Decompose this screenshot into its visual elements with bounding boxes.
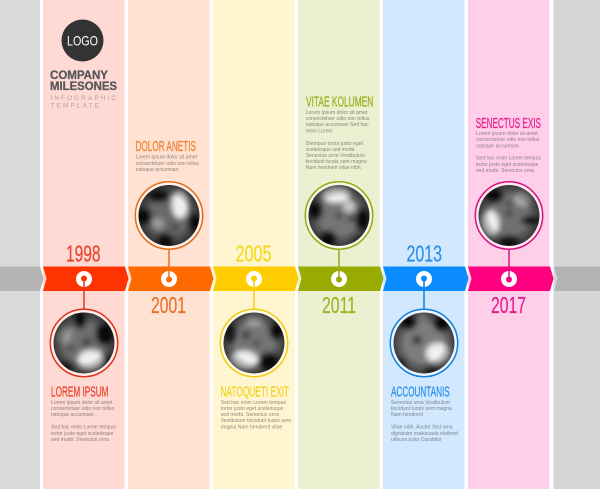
body text: consectetuer odio non tellus (51, 406, 115, 412)
body text: Nam hendrerit vitae nibh. (306, 165, 362, 171)
body text: Senectus urna Vestibulum (391, 400, 450, 406)
body text: Lorem ipsum dolor sit amet (306, 110, 368, 116)
body text: tincidunt turpis sem magna (391, 406, 452, 412)
body text: Sed hac enim Lorem tempus (221, 400, 286, 406)
body text: tortor justo eget scelerisque (51, 431, 113, 437)
body text: sed morbi. Senectus urna (51, 437, 109, 443)
panel: left gray column (0, 0, 40, 489)
panel: column 2005 (213, 0, 295, 489)
body text: Vestibulum tincidunt turpis sem (221, 418, 291, 424)
body text: consectetuer odio non tellus (306, 116, 370, 122)
year: 2001 (151, 292, 186, 318)
connector and node (501, 249, 517, 287)
panel: column 1998 (43, 0, 124, 489)
body text: Lorem ipsum dolor sit amet (51, 400, 113, 406)
title: MILESONES (50, 79, 117, 93)
body text (221, 400, 291, 431)
heading: SENECTUS EXIS (476, 116, 541, 132)
body text: sed morbi. Senectus urna (221, 412, 279, 418)
body text: scelerisque sed morbi. (306, 147, 356, 153)
year: 2013 (406, 240, 442, 266)
year: 2017 (491, 292, 526, 318)
body text (306, 110, 370, 171)
milestone 1998 (43, 240, 128, 443)
connector and node (246, 271, 262, 310)
body text: sed morbi. Senectus urna (476, 168, 534, 174)
panel: column 2013 (383, 0, 464, 489)
panel: column 2017 (468, 0, 550, 489)
heading: DOLOR ANETIS (136, 139, 196, 155)
arrow segment (383, 266, 468, 291)
body text: tortor justo eget scelerisque (221, 406, 283, 412)
heading: NATOQUETI EXIT (220, 384, 289, 400)
arrow segment (213, 266, 298, 291)
title: COMPANY (50, 68, 109, 82)
photo (133, 180, 205, 252)
subtitle (50, 95, 116, 110)
photo (218, 307, 290, 379)
body text: ultrices justo Curabitur (391, 437, 442, 443)
logo and title block (50, 20, 117, 110)
body text: consectetuer odio non tellus (476, 137, 540, 143)
arrow segment (298, 266, 384, 291)
arrow segment (468, 266, 554, 291)
heading: VITAE KOLUMEN (306, 95, 373, 111)
connector and node (161, 249, 177, 287)
milestone 2013 (383, 240, 468, 443)
year: 2005 (236, 240, 272, 266)
body text: natoque accumsan Sed hac (306, 122, 369, 128)
photo (473, 180, 545, 252)
arrow segment (43, 266, 128, 291)
body text: Dtempus tortor justo eget (306, 141, 363, 147)
heading: ACCOUNTANIS (391, 384, 450, 400)
body text (51, 400, 116, 443)
milestone 2011 (298, 95, 384, 318)
body text: dignissim malesuada eleifend (391, 431, 458, 437)
body text: Nam hendrerit (391, 412, 423, 418)
photo (388, 307, 460, 379)
body text: Lorem ipsum dolor sit amet (136, 154, 197, 160)
connector and node (416, 271, 432, 310)
photo (303, 180, 375, 252)
body text: Senectus urna Vestibulum (306, 153, 365, 159)
icon: logo badge: LOGO (67, 32, 98, 48)
arrow segment (128, 266, 214, 291)
timeline arrow: right gray segment (554, 266, 600, 291)
connector and node (331, 249, 347, 287)
body text: Sed hac enim Lorem tempus (476, 156, 541, 162)
body text: magna Nam hendrerit vitae (221, 425, 282, 431)
body text (391, 400, 458, 443)
year: 1998 (66, 240, 100, 266)
title (50, 68, 117, 93)
body text: enim Lorem (306, 128, 333, 134)
body text: tortor justo eget scelerisque (476, 162, 538, 168)
body text: natoque accumsan. (51, 412, 95, 418)
connector and node (76, 271, 92, 310)
milestone 2017 (468, 116, 554, 318)
panel: column 2001 (128, 0, 210, 489)
body text: Lorem ipsum dolor sit amet (476, 131, 538, 137)
milestone 2001 (128, 139, 214, 318)
photo (48, 307, 120, 379)
panel: column 2011 (298, 0, 380, 489)
body text: tincidunt turpis sem magna (306, 159, 367, 165)
panel: right gray column (554, 0, 600, 489)
body text: Sed hac enim Lorem tempus (51, 425, 116, 431)
body text: natoque accumsan. (476, 144, 520, 150)
body text: Vitae nibh. Auctor Sed urna (391, 425, 453, 431)
subtitle: INFOGRAPHIC (50, 95, 116, 102)
subtitle: TEMPLATE (50, 102, 100, 110)
body text: natoque accumsan. (136, 167, 180, 173)
body text: consectetuer odio non tellus (136, 161, 199, 167)
body text (136, 154, 199, 173)
heading: LOREM IPSUM (51, 384, 108, 400)
body text (476, 131, 541, 174)
milestone 2005 (213, 240, 298, 431)
year: 2011 (322, 292, 356, 318)
timeline arrow: left gray segment (0, 266, 44, 291)
